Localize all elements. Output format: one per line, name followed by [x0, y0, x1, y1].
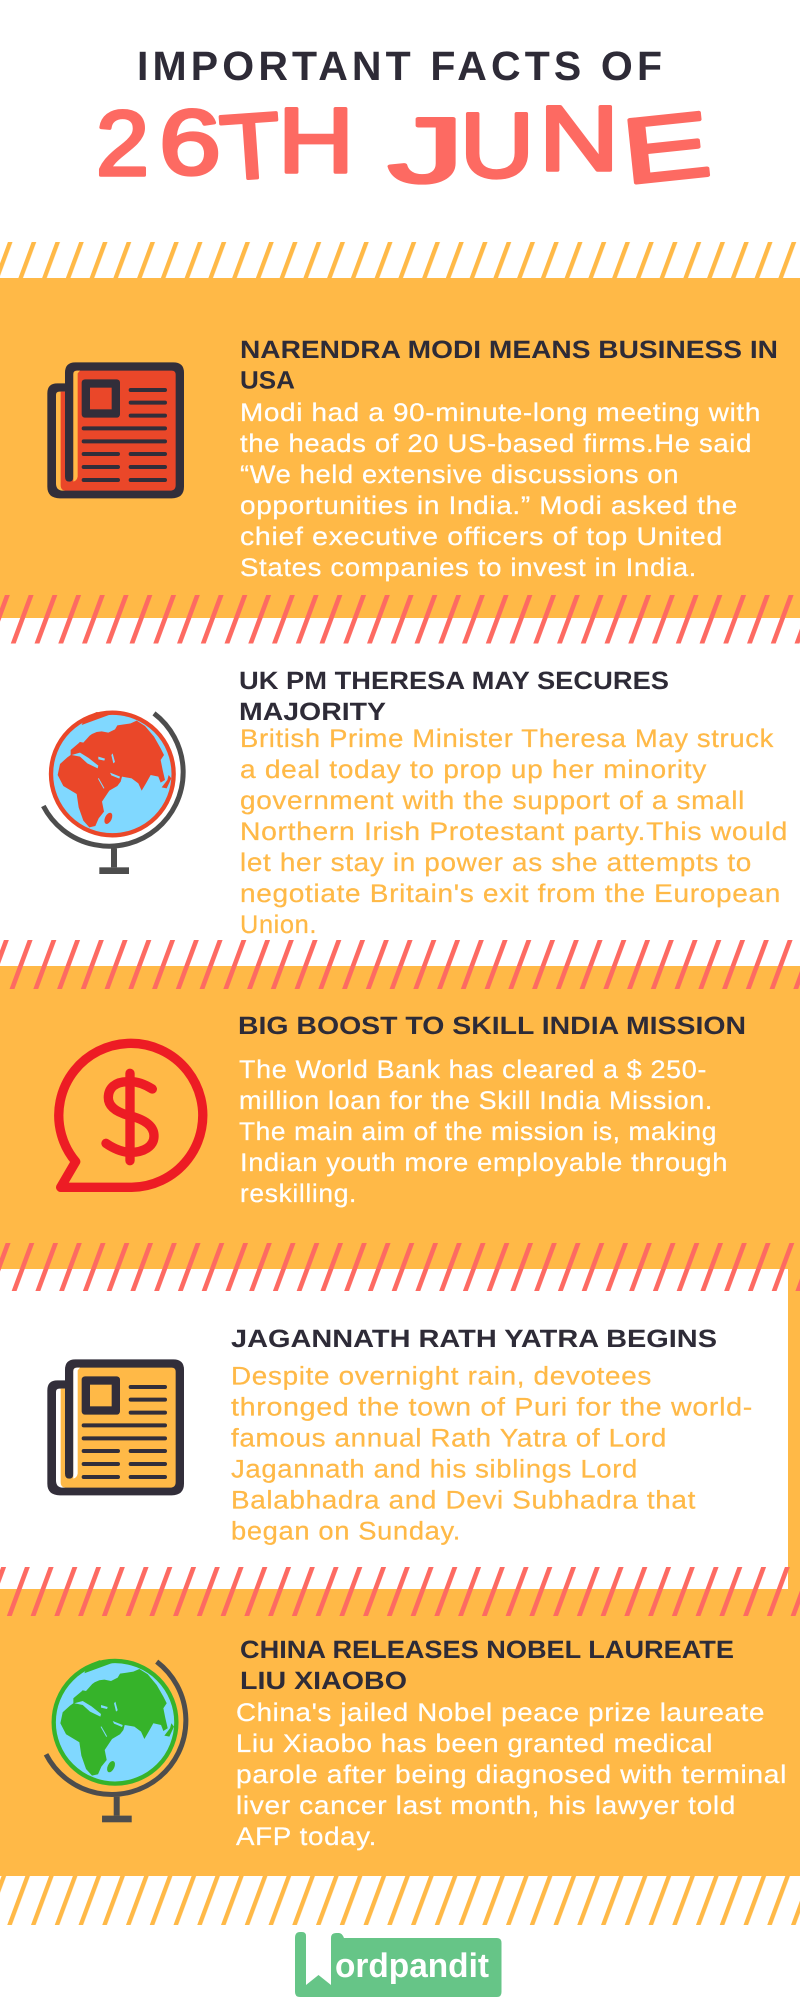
- panel: Theresa May: [0, 618, 800, 966]
- body text: million loan for the Skill India Mission.: [239, 1087, 713, 1115]
- body text: Jagannath and his siblings Lord: [231, 1456, 638, 1484]
- body text: [236, 1699, 787, 1851]
- heading: date: 6: [159, 92, 221, 194]
- heading: BIG BOOST TO SKILL INDIA MISSION: [238, 1012, 746, 1040]
- body text: chief executive officers of top United: [240, 523, 723, 551]
- body text: thronged the town of Puri for the world-: [231, 1394, 753, 1422]
- heading: NARENDRA MODI MEANS BUSINESS IN: [240, 336, 778, 364]
- heading: date: J: [388, 100, 464, 202]
- panel: Liu Xiaobo: [0, 1589, 800, 1876]
- body text: [240, 399, 761, 582]
- heading: date: H: [278, 90, 354, 192]
- body text: a deal today to prop up her minority: [240, 756, 707, 784]
- heading: date: E: [617, 93, 715, 204]
- right edge strip: [788, 1269, 800, 1589]
- body text: Northern Irish Protestant party.This would: [240, 818, 788, 846]
- heading: MAJORITY: [239, 698, 386, 726]
- panel: Narendra Modi: [0, 278, 800, 618]
- body text: Liu Xiaobo has been granted medical: [236, 1730, 713, 1758]
- body text: British Prime Minister Theresa May struck: [240, 725, 774, 753]
- heading: UK PM THERESA MAY SECURES: [239, 667, 669, 695]
- body text: [231, 1362, 753, 1546]
- heading: JAGANNATH RATH YATRA BEGINS: [231, 1325, 717, 1353]
- body text: let her stay in power as she attempts to: [240, 849, 752, 877]
- heading: date: N: [539, 88, 619, 190]
- body text: opportunities in India.” Modi asked the: [240, 492, 738, 520]
- body text: Balabhadra and Devi Subhadra that: [231, 1486, 696, 1514]
- heading: date: [96, 88, 715, 204]
- heading: [240, 1636, 734, 1695]
- body text: government with the support of a small: [240, 787, 745, 815]
- body text: [240, 725, 788, 939]
- logo: Wordpandit: ordpandit: [335, 1947, 489, 1985]
- body text: [239, 1056, 728, 1208]
- body text: liver cancer last month, his lawyer told: [236, 1792, 736, 1820]
- body text: began on Sunday.: [231, 1518, 461, 1546]
- body text: China's jailed Nobel peace prize laureate: [236, 1699, 765, 1727]
- body text: The World Bank has cleared a $ 250-: [239, 1056, 707, 1084]
- icon: newspaper: [47, 1359, 184, 1495]
- logo: Wordpandit: [295, 1932, 502, 1997]
- body text: Indian youth more employable through: [240, 1149, 728, 1177]
- title: [96, 43, 715, 204]
- body text: “We held extensive discussions on: [240, 461, 679, 489]
- panel: Rath Yatra: [0, 1269, 800, 1589]
- body text: parole after being diagnosed with terminal: [236, 1761, 787, 1789]
- body text: Despite overnight rain, devotees: [231, 1362, 652, 1390]
- heading: date: U: [460, 95, 534, 197]
- body text: Union.: [240, 911, 317, 939]
- body text: States companies to invest in India.: [240, 554, 697, 582]
- icon: dollar speech bubble: [59, 1043, 203, 1187]
- icon: globe: [41, 712, 196, 874]
- heading: [239, 667, 669, 726]
- body text: AFP today.: [236, 1823, 377, 1851]
- icon: newspaper: [47, 362, 184, 498]
- body text: The main aim of the mission is, making: [239, 1118, 717, 1146]
- icon: globe: [46, 1660, 186, 1822]
- heading: LIU XIAOBO: [240, 1667, 407, 1695]
- heading: important facts of: IMPORTANT FACTS OF: [137, 43, 662, 89]
- heading: USA: [240, 366, 295, 394]
- heading: [240, 336, 778, 394]
- body text: the heads of 20 US-based firms.He said: [240, 430, 752, 458]
- body text: reskilling.: [240, 1180, 357, 1208]
- panel: Skill India: [0, 966, 800, 1269]
- heading: CHINA RELEASES NOBEL LAUREATE: [240, 1636, 734, 1664]
- body text: negotiate Britain's exit from the European: [240, 880, 781, 908]
- body text: famous annual Rath Yatra of Lord: [231, 1424, 667, 1452]
- body text: Modi had a 90-minute-long meeting with: [240, 399, 761, 427]
- heading: date: T: [217, 94, 284, 200]
- heading: date: 2: [96, 93, 149, 195]
